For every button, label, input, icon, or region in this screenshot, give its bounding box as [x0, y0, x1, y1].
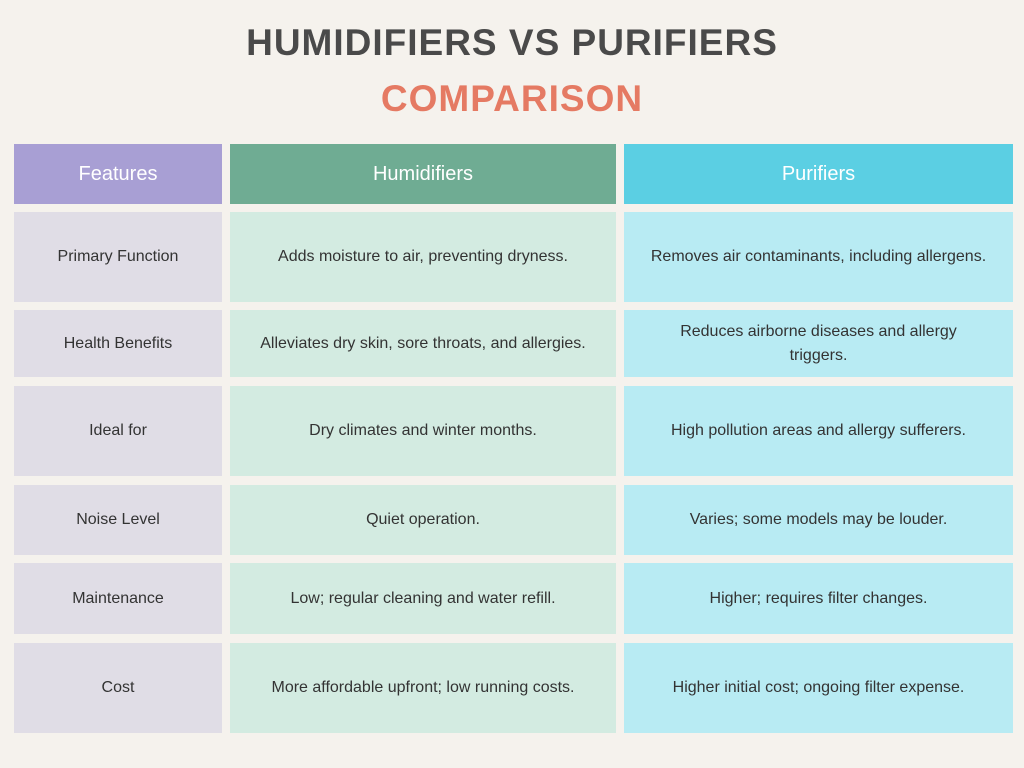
title: HUMIDIFIERS VS PURIFIERS: [246, 22, 778, 63]
header: features: [14, 144, 222, 204]
header: humidifiers: Humidifiers: [373, 163, 473, 185]
cell: High pollution areas and allergy sufferers.: [671, 422, 966, 439]
cell: Low; regular cleaning and water refill.: [290, 590, 556, 606]
row: health benefits: Health Benefits: [64, 334, 172, 352]
cell: Reduces airborne diseases and allergy triggers.: [680, 322, 957, 364]
cell: [230, 310, 616, 377]
cell: [230, 485, 616, 555]
row: cost: Cost: [102, 679, 134, 696]
cell: Dry climates and winter months.: [309, 422, 537, 439]
row: noise level: Noise Level: [76, 511, 160, 528]
header: purifiers: Purifiers: [782, 163, 855, 185]
cell: [230, 212, 616, 302]
header: humidifiers: [230, 144, 616, 204]
cell: Removes air contaminants, including allergens.: [651, 248, 986, 265]
row: primary function: Primary Function: [58, 248, 178, 265]
cell: More affordable upfront; low running costs.: [272, 679, 574, 696]
row: maintenance: [14, 563, 222, 634]
row: noise level: [14, 485, 222, 555]
row: maintenance: Maintenance: [72, 590, 164, 606]
cell: Higher initial cost; ongoing filter expense.: [673, 679, 964, 696]
cell: Alleviates dry skin, sore throats, and allergies.: [260, 334, 586, 352]
row: health benefits: [14, 310, 222, 377]
subtitle: COMPARISON: [381, 78, 643, 119]
cell: Quiet operation.: [366, 511, 480, 528]
cell: [624, 563, 1013, 634]
cell: [230, 643, 616, 733]
row: primary function: [14, 212, 222, 302]
row: ideal for: Ideal for: [89, 422, 147, 439]
header: purifiers: [624, 144, 1013, 204]
cell: [230, 386, 616, 476]
cell: [624, 386, 1013, 476]
cell: [624, 212, 1013, 302]
cell: Adds moisture to air, preventing dryness.: [278, 248, 568, 265]
row: cost: [14, 643, 222, 733]
header: features: Features: [79, 163, 157, 185]
cell: Higher; requires filter changes.: [710, 590, 927, 606]
row: ideal for: [14, 386, 222, 476]
cell: Varies; some models may be louder.: [690, 511, 947, 528]
cell: [624, 643, 1013, 733]
cell: [624, 485, 1013, 555]
cell: [624, 310, 1013, 377]
cell: [230, 563, 616, 634]
